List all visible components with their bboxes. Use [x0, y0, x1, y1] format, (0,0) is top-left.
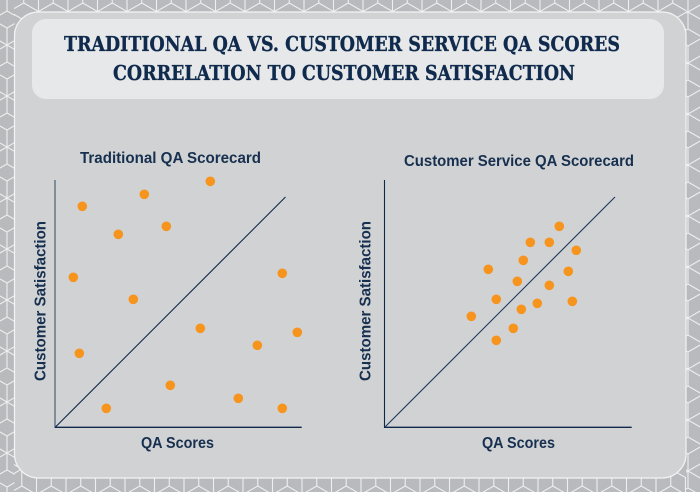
title line 2: CORRELATION TO CUSTOMER SATISFACTION — [113, 61, 575, 85]
x axis label: QA Scores — [482, 435, 555, 452]
x axis label: QA Scores — [141, 435, 214, 452]
diagonal trend line — [56, 197, 286, 427]
title banner — [32, 19, 664, 99]
x axis — [384, 426, 632, 428]
clustered data points — [466, 222, 581, 345]
title line 1: TRADITIONAL QA VS. CUSTOMER SERVICE QA SCORES — [64, 32, 620, 56]
y axis — [384, 180, 386, 428]
y axis label: Customer Satisfaction — [32, 221, 50, 381]
y axis label: Customer Satisfaction — [358, 221, 374, 381]
diagonal trend line — [385, 197, 615, 427]
chart: traditional QA scorecard — [32, 150, 302, 452]
chart heading: Customer Service QA Scorecard — [404, 153, 634, 170]
scattered data points — [68, 176, 302, 413]
chart heading: Traditional QA Scorecard — [80, 150, 261, 167]
chart: customer service QA scorecard — [358, 153, 634, 452]
x axis — [55, 426, 302, 428]
y axis — [54, 180, 56, 428]
